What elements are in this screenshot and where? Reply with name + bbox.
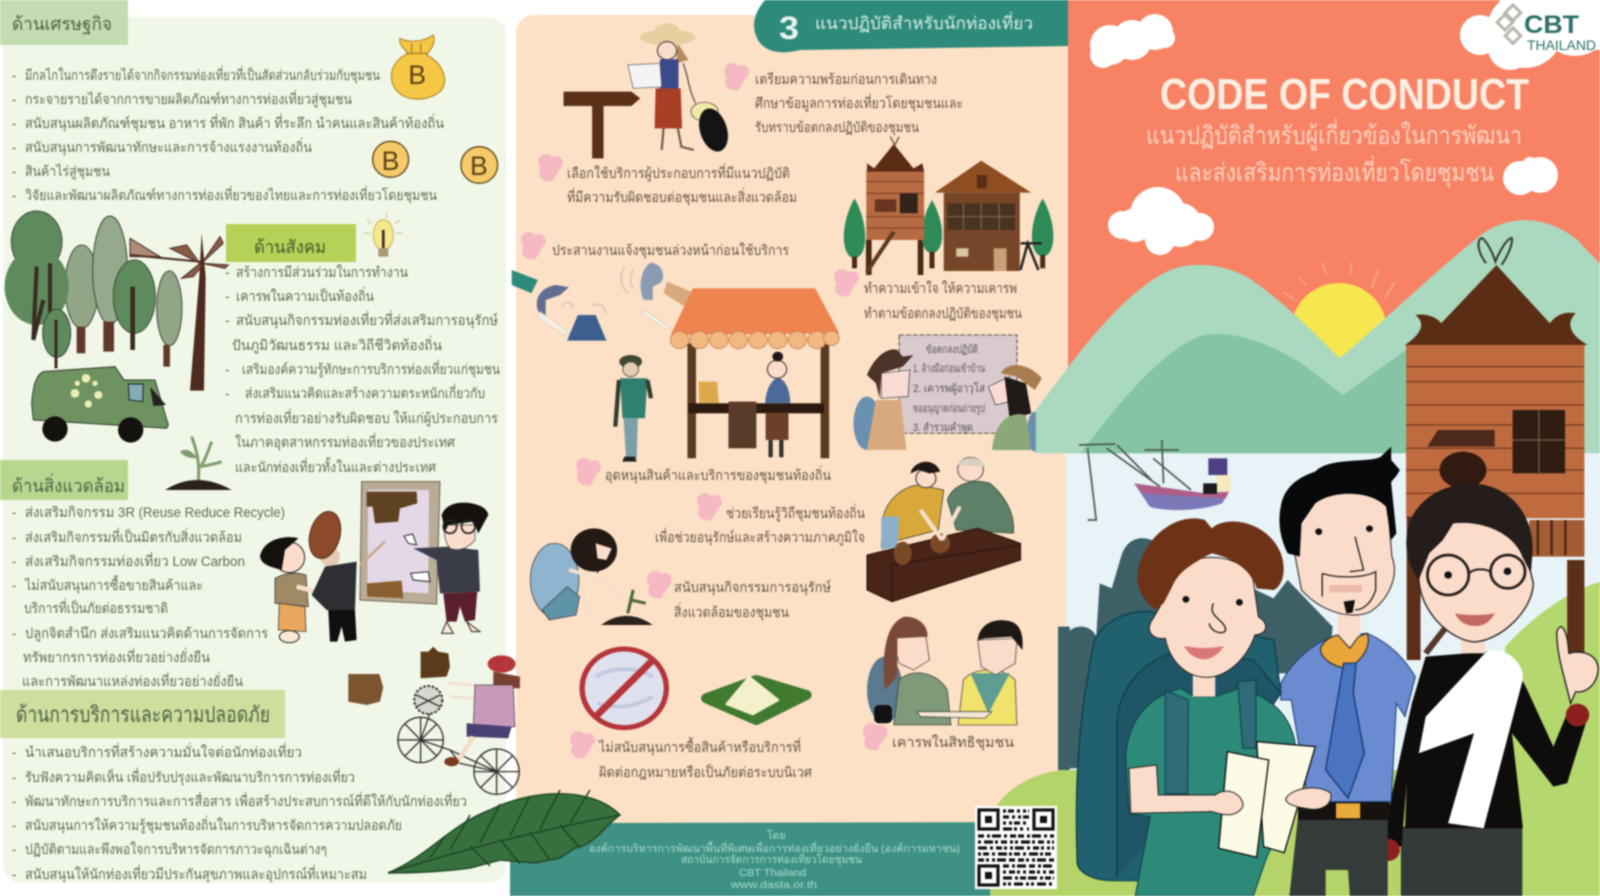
panel: centre column background	[516, 15, 1072, 896]
text block: contact community in advance	[521, 232, 789, 260]
text block: service and safety list: -	[12, 744, 17, 760]
scenery: rocks and grass	[1058, 517, 1600, 896]
text block: service and safety list: สนับสนุนการให้ความรู้ชุมชนท้องถิ่นในการบริหารจัดการความปลอดภัย	[25, 816, 402, 834]
text block: support conservation: สิ่งแวดล้อมของชุมชน	[674, 603, 789, 621]
illustration: pottery making	[867, 457, 1021, 602]
text block: social list: -	[225, 385, 230, 401]
icon: coin	[373, 141, 409, 177]
text block: service and safety list: สนับสนุนให้นักท่องเที่ยวมีประกันสุขภาพและอุปกรณ์ที่เหมาะสม	[25, 865, 367, 883]
text block: no illegal goods	[570, 731, 812, 780]
text block: economy list: สนับสนุนการพัฒนาทักษะและการจ้างแรงงานท้องถิ่น	[25, 138, 312, 156]
text block: social list: สร้างการมีส่วนร่วมในการทำงาน	[236, 264, 408, 280]
text block: service and safety list: รับฟังความคิดเห็น เพื่อปรับปรุงและพัฒนาบริการการท่องเที่ยว	[25, 768, 355, 786]
illustration: man in blue shirt	[1279, 447, 1415, 896]
panel: footer credits: สถาบันการจัดการการท่องเที่ยวโดยชุมชน	[681, 852, 862, 866]
icon: seedling	[165, 437, 232, 490]
illustration: community houses	[844, 137, 1053, 275]
text block: respect community rules: ทำความเข้าใจ ให้ความเคารพ	[864, 280, 1017, 296]
board text: ข้อตกลงปฏิบัติ	[926, 344, 978, 356]
text block: learn local way of life: ช่วยเรียนรู้วิถีชุมชนท้องถิ่น	[726, 504, 865, 522]
logo: CBT Thailand: THAILAND	[1527, 37, 1596, 53]
lime hill behind QR	[990, 627, 1070, 896]
board text: 1. ล้างมือก่อนเข้าบ้าน	[913, 362, 985, 375]
heading: guidelines for tourists: 3	[779, 10, 799, 46]
illustration: tourists reading the code board	[853, 335, 1043, 452]
text block: environment list: -	[12, 529, 17, 545]
text block: social list	[225, 264, 500, 475]
subtitle: และส่งเสริมการท่องเที่ยวโดยชุมชน	[1175, 155, 1494, 188]
illustration: trees and windmill	[5, 211, 228, 391]
illustration: children doing a puzzle board	[260, 482, 488, 643]
illustration: market stall	[670, 288, 839, 458]
text block: social list: เคารพในความเป็นท้องถิ่น	[236, 287, 374, 304]
text block: economy list: -	[12, 67, 17, 83]
text block: environment list	[12, 504, 285, 689]
illustration: signpost and traveller	[564, 23, 733, 158]
text block: environment list: บริการที่เป็นภัยต่อธรรมชาติ	[24, 599, 168, 616]
text block: service and safety list: -	[12, 866, 17, 882]
illustration: backpacker with map	[1076, 518, 1331, 896]
text block: learn local way of life: เพื่อช่วยอนุรักษ์และสร้างความภาคภูมิใจ	[655, 528, 865, 546]
clouds	[1090, 0, 1600, 255]
panel: footer credits: CBT Thailand	[739, 867, 806, 879]
text block: economy list: วิจัยและพัฒนาผลิตภัณฑ์ทางการท่องเที่ยวของไทยและการท่องเที่ยวโดยชุมชน	[25, 186, 437, 204]
text block: social list: สนับสนุนกิจกรรมท่องเที่ยวที่ส่งเสริมการอนุรักษ์	[236, 311, 498, 329]
heading: service and safety: ด้านการบริการและความปลอดภัย	[16, 702, 270, 727]
text block: social list: ส่งเสริมแนวคิดและสร้างความตระหนักเกี่ยวกับ	[245, 384, 485, 401]
icon: sun	[1283, 262, 1395, 379]
text block: service and safety list: -	[12, 769, 17, 785]
text block: environment list: -	[12, 625, 17, 641]
icon: money bag	[391, 35, 444, 99]
panel: footer credits	[510, 822, 1072, 896]
text block: economy list: กระจายรายได้จากการขายผลิตภัณฑ์ทางการท่องเที่ยวสู่ชุมชน	[25, 90, 352, 108]
icon: puzzle piece	[348, 674, 383, 705]
text block: environment list: และการพัฒนาแหล่งท่องเที่ยวอย่างยั่งยืน	[22, 672, 243, 689]
panel: footer credits: องค์การบริหารการพัฒนาพื้นที่พิเศษเพื่อการท่องเที่ยวอย่างยั่งยืน (องค์การมหาชน)	[589, 841, 960, 855]
heading: economy: ด้านเศรษฐกิจ	[12, 14, 112, 35]
text block: support conservation	[647, 571, 831, 621]
illustration: recycling truck	[32, 367, 168, 443]
board text: ขออนุญาตก่อนถ่ายรูป	[913, 403, 985, 415]
panel: left column background	[3, 17, 506, 883]
text block: choose responsible operators	[538, 154, 797, 206]
text block: economy list: -	[12, 187, 17, 203]
text block: prepare before travelling: รับทราบข้อตกลงปฏิบัติของชุมชน	[755, 119, 919, 136]
text block: social list: -	[225, 312, 230, 328]
text block: support conservation: สนับสนุนกิจกรรมการอนุรักษ์	[674, 579, 831, 596]
heading: environment: ด้านสิ่งแวดล้อม	[12, 473, 125, 496]
text block: choose responsible operators: ที่มีความรับผิดชอบต่อชุมชนและสิ่งแวดล้อม	[567, 188, 797, 206]
cover lower sky	[1066, 450, 1600, 896]
text block: environment list: ไม่สนับสนุนการซื้อขายสินค้าและ	[24, 575, 203, 594]
icon: puzzle piece	[421, 647, 450, 678]
text block: economy list: -	[12, 163, 17, 179]
text block: social list: การท่องเที่ยวอย่างรับผิดชอบ ให้แก่ผู้ประกอบการ	[235, 409, 498, 427]
subtitle	[1146, 118, 1522, 188]
board text	[913, 344, 985, 434]
illustration: traditional stilt house	[1405, 238, 1588, 518]
text block: economy list: สนับสนุนผลิตภัณฑ์ชุมชน อาหาร ที่พัก สินค้า ที่ระลึก นำคนและสินค้าท้องถิ่น	[25, 114, 444, 132]
text block: no illegal goods: ผิดต่อกฎหมายหรือเป็นภัยต่อระบบนิเวศ	[599, 763, 812, 780]
text block: environment list: ส่งเสริมกิจกรรมท่องเที่ยว Low Carbon	[25, 552, 245, 569]
illustration: banana leaf	[388, 790, 620, 873]
icon: coin	[461, 147, 498, 183]
text block: service and safety list: ปฏิบัติตามและพึงพอใจการบริหารจัดการภาวะฉุกเฉินต่างๆ	[25, 841, 327, 858]
illustration: fishing boat	[1079, 440, 1231, 520]
icon: light bulb	[363, 213, 403, 257]
text block: prepare before travelling	[724, 63, 963, 136]
text block: choose responsible operators: เลือกใช้บริการผู้ประกอบการที่มีแนวปฏิบัติ	[567, 164, 790, 182]
subtitle: แนวปฏิบัติสำหรับผู้เกี่ยวข้องในการพัฒนา	[1146, 118, 1522, 151]
text block: economy list: มีกลไกในการดึงรายได้จากกิจกรรมท่องเที่ยวที่เป็นสัดส่วนกลับร่วมกับชุมชน	[25, 66, 380, 84]
illustration: cyclist	[398, 655, 520, 794]
text block: environment list: -	[12, 577, 17, 593]
text block: environment list: ส่งเสริมกิจกรรม 3R (Reuse Reduce Recycle)	[25, 504, 285, 520]
text block: social list: เสริมองค์ความรู้ทักษะการบริการท่องเที่ยวแก่ชุมชน	[242, 360, 500, 378]
text block: service and safety list: นำเสนอบริการที่สร้างความมั่นใจต่อนักท่องเที่ยว	[25, 743, 302, 760]
text block: learn local way of life	[655, 493, 865, 546]
heading: environment	[0, 460, 128, 500]
text block: service and safety list: -	[12, 793, 17, 809]
icon: money bag: B	[408, 60, 426, 90]
text block: service and safety list: -	[12, 817, 17, 833]
icon: coin: B	[470, 151, 488, 181]
text block: support local products	[576, 458, 831, 486]
logo: CBT Thailand	[1497, 5, 1596, 53]
heading: social	[226, 224, 356, 262]
logo: CBT Thailand: CBT	[1524, 11, 1579, 39]
text block: social list: -	[225, 264, 230, 280]
text block: environment list: -	[12, 504, 17, 520]
text block: environment list: ปลูกจิตสำนึก ส่งเสริมแนวคิดด้านการจัดการ	[25, 625, 268, 642]
text block: social list: -	[225, 361, 230, 377]
text block: prepare before travelling: ศึกษาข้อมูลการท่องเที่ยวโดยชุมชนและ	[755, 94, 963, 112]
text block: prepare before travelling: เตรียมความพร้อมก่อนการเดินทาง	[755, 71, 937, 87]
illustration: telephone call	[512, 263, 694, 341]
text block: environment list: ส่งเสริมกิจกรรมที่เป็นมิตรกับสิ่งแวดล้อม	[25, 528, 242, 545]
text block: social list: และนักท่องเที่ยวทั้งในและต่างประเทศ	[235, 457, 436, 475]
text block: respect community rules: ทำตามข้อตกลงปฏิบัติของชุมชน	[864, 305, 1022, 322]
illustration: planting a tree	[530, 528, 653, 625]
illustration: tourist and host talking	[867, 617, 1023, 725]
heading: guidelines for tourists: แนวปฏิบัติสำหรับนักท่องเที่ยว	[815, 11, 1033, 33]
text block: service and safety list: -	[12, 841, 17, 857]
text block: contact community in advance: ประสานงานแจ้งชุมชนล่วงหน้าก่อนใช้บริการ	[552, 242, 789, 259]
text block: social list: -	[225, 288, 230, 304]
panel: cover sky	[1068, 0, 1600, 460]
text block: respect community rights: เคารพในสิทธิชุมชน	[892, 734, 1014, 751]
board text: 2. เคารพผู้อาวุโส	[913, 381, 985, 395]
illustration: food on banana leaf	[706, 677, 806, 720]
text block: environment list: -	[12, 553, 17, 569]
text block: service and safety list	[12, 743, 467, 883]
heading: service and safety	[0, 690, 285, 738]
text block: economy list: -	[12, 115, 17, 131]
text block: economy list: -	[12, 91, 17, 107]
icon: prohibited items	[582, 649, 666, 728]
text block: no illegal goods: ไม่สนับสนุนการซื้อสินค้าหรือบริการที่	[598, 737, 801, 756]
board text: 3. สำรวมคำพูด	[913, 422, 973, 434]
illustration: tourist with camera	[615, 355, 651, 462]
background mountains	[1036, 220, 1600, 453]
text block: economy list: สินค้าไร่สู่ชุมชน	[25, 163, 110, 180]
heading: guidelines for tourists	[754, 0, 1072, 52]
text block: support local products: อุดหนุนสินค้าและบริการของชุมชนท้องถิ่น	[605, 466, 831, 484]
icon: coin: B	[382, 146, 399, 176]
text block: environment list: ทรัพยากรการท่องเที่ยวอย่างยั่งยืน	[23, 648, 210, 665]
panel: footer credits: www.dasta.or.th	[730, 879, 817, 891]
text block: social list: ในภาคอุตสาหกรรมท่องเที่ยวของประเทศ	[235, 433, 455, 451]
heading: economy	[0, 0, 128, 45]
text block: social list: ปันภูมิวัฒนธรรม และวิถีชีวิตท้องถิ่น	[232, 336, 442, 354]
text block: respect community rules	[834, 269, 1022, 322]
panel: footer credits: โดย	[767, 829, 786, 842]
text block: economy list: -	[12, 139, 17, 155]
illustration: woman host	[1377, 452, 1598, 896]
text block: economy list	[12, 66, 444, 204]
icon: QR code	[975, 806, 1057, 889]
text block: service and safety list: พัฒนาทักษะการบริการและการสื่อสาร เพื่อสร้างประสบการณ์ที่ดีให้กับนักท่องเที่ยว	[25, 792, 467, 809]
title: CODE OF CONDUCT	[1160, 70, 1529, 119]
heading: social: ด้านสังคม	[254, 237, 326, 257]
text block: respect community rights	[863, 723, 1014, 751]
